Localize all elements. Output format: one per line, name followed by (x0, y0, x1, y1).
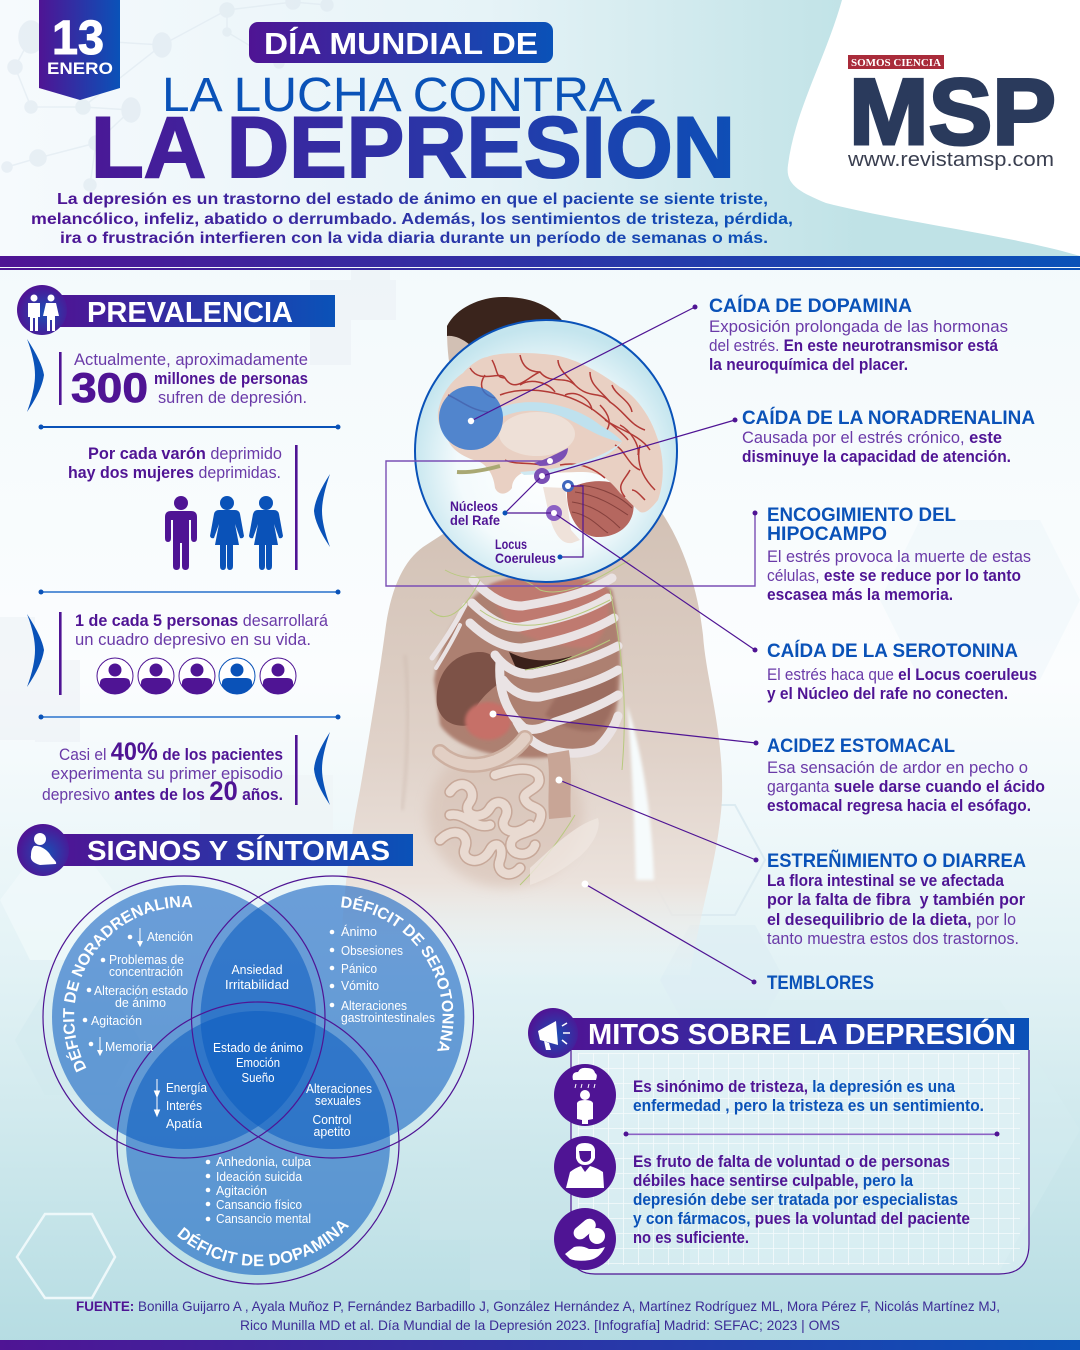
stat: 40%: experimenta su primer episodio (51, 765, 283, 783)
caída de la noradrenalina: disminuye la capacidad de atención. (742, 448, 1011, 466)
serotonina list: Obsesiones (341, 944, 403, 958)
shared: energía: Interés (166, 1099, 202, 1113)
cerebellum (567, 481, 634, 537)
title: LA LUCHA CONTRA (162, 69, 622, 122)
body silhouette (340, 510, 722, 975)
callout nodes (468, 304, 758, 984)
shared: alteraciones (306, 1082, 372, 1139)
shared: energía (154, 1079, 207, 1131)
mitos heading: MITOS SOBRE LA DEPRESIÓN (588, 1017, 1016, 1051)
stat: 40%: Casi el 40% de los pacientes (59, 738, 283, 766)
shared: alteraciones: Control (312, 1113, 352, 1127)
footer sources: FUENTE: Bonilla Guijarro A , Ayala Muñoz P, Fernández Barbadillo J, González Hernández A, Martínez Rodríguez ML, Mora Pérez F, Nicolás Martínez MJ, (76, 1298, 1000, 1314)
mitos heading (528, 1008, 1029, 1058)
panel: mitos (528, 1008, 1029, 1274)
background crosses and hexagons (0, 270, 1080, 1298)
corpus callosum (500, 402, 622, 442)
noradrenalina list (83, 928, 193, 1055)
liver (437, 652, 500, 726)
venn diagram (42, 875, 474, 1285)
encogimiento del hipocampo: ENCOGIMIENTO DEL (767, 504, 956, 526)
estreñimiento o diarrea: La flora intestinal se ve afectada (767, 872, 1005, 890)
callout lines (386, 307, 756, 982)
acidez estomacal: garganta suele darse cuando el ácido (767, 778, 1045, 796)
stat: 300 millones: sufren de depresión. (158, 389, 307, 407)
stat: por cada varón: Por cada varón deprimido (88, 445, 282, 463)
estreñimiento o diarrea: por la falta de fibra y también por (767, 891, 1026, 909)
date ribbon (39, 0, 120, 100)
venn label: noradrenalina: DÉFICIT DE NORADRENALINA (63, 896, 192, 1072)
noradrenalina list: Memoria (105, 1040, 153, 1054)
caída de dopamina: CAÍDA DE DOPAMINA (709, 294, 912, 317)
noradrenalina list: Atención (147, 930, 193, 944)
caída de la serotonina: y el Núcleo del rafe no conecten. (767, 685, 1008, 703)
background molecules (2, 0, 333, 191)
olfactory tract (457, 466, 500, 472)
shared: ansiedad (225, 963, 289, 992)
footer sources: Rico Munilla MD et al. Día Mundial de la Depresión 2023. [Infografía] Madrid: SEFAC; 2023 | OMS (240, 1317, 840, 1333)
dopamina list: Cansancio físico (216, 1198, 302, 1212)
header white curve (788, 0, 1080, 256)
lungs (490, 576, 609, 648)
stat: 300 millones: 300 (71, 364, 148, 411)
locus node (562, 480, 574, 492)
thalamus (499, 412, 575, 456)
acidez estomacal (767, 735, 1045, 815)
shared: energía: Apatía (166, 1117, 202, 1131)
ribs (432, 578, 618, 753)
icon: woman (210, 496, 244, 570)
shared: ansiedad: Ansiedad (232, 963, 283, 977)
sulci (448, 355, 655, 500)
acidez estomacal: Esa sensación de ardor en pecho o (767, 759, 1028, 777)
stat: 300 millones: millones de personas (154, 370, 308, 388)
lower left organs (545, 672, 616, 731)
myth 2 text: y con fármacos, pues la voluntad del paciente (633, 1210, 970, 1228)
node labels: del Rafe (450, 512, 500, 528)
noradrenalina list: Alteración estado (94, 984, 188, 998)
dopamina list: Anhedonia, culpa (216, 1155, 311, 1169)
stat: 300 millones (27, 339, 308, 412)
caída de la serotonina: CAÍDA DE LA SEROTONINA (767, 639, 1018, 662)
brainstem (543, 487, 580, 543)
divider (38, 590, 340, 594)
title pill: DÍA MUNDIAL DE (264, 26, 538, 61)
serotonina list: Ánimo (341, 924, 377, 939)
encogimiento del hipocampo: escasea más la memoria. (767, 586, 953, 604)
stat: 1 de cada 5 (27, 612, 329, 695)
dark cavity (509, 652, 572, 674)
brain lens (415, 320, 677, 582)
dopamina list: Agitación (216, 1184, 267, 1198)
caída de la serotonina: El estrés haca que el Locus coeruleus (767, 666, 1037, 684)
caída de la noradrenalina: Causada por el estrés crónico, este (742, 429, 1002, 447)
serotonina list: Vómito (341, 979, 379, 993)
myth 1 text: Es sinónimo de tristeza, la depresión es una (633, 1078, 956, 1096)
dopamine area (439, 386, 503, 450)
header background (0, 0, 1080, 257)
serotonina list: Alteraciones (341, 999, 407, 1013)
stat: 300 millones: Actualmente, aproximadamente (74, 350, 308, 369)
icon: man (165, 496, 197, 570)
thoracic cavity (434, 576, 620, 758)
caída de dopamina: Exposición prolongada de las hormonas (709, 318, 1008, 336)
myth 2 text (633, 1153, 970, 1247)
shared: ansiedad: Irritabilidad (225, 978, 289, 992)
shared: centre (213, 1041, 303, 1085)
icon: megaphone (538, 1021, 570, 1050)
dopamina list: Cansancio mental (216, 1212, 311, 1226)
shared: centre: Estado de ánimo (213, 1041, 303, 1055)
estreñimiento o diarrea (767, 849, 1026, 948)
dopamina list: Ideación suicida (216, 1170, 302, 1184)
header band (0, 256, 1080, 270)
node labels: Núcleos (450, 498, 498, 514)
panel: prevalencia heading (17, 285, 335, 335)
human body illustration (340, 297, 722, 975)
caída de la noradrenalina: CAÍDA DE LA NORADRENALINA (742, 406, 1035, 429)
footer sources (76, 1298, 1000, 1333)
temblores: TEMBLORES (767, 972, 874, 994)
intro paragraph: ira o frustración interfieren con la vida diaria durante un período de semanas o más. (60, 230, 768, 247)
intestine loops shadow (440, 769, 541, 874)
shared: energía: Energía (166, 1081, 207, 1095)
node labels (450, 498, 556, 566)
estreñimiento o diarrea: el desequilibrio de la dieta, por lo (767, 911, 1016, 929)
encogimiento del hipocampo: HIPOCAMPO (767, 523, 887, 545)
myth 2 text: depresión debe ser tratada por especialistas (633, 1191, 958, 1209)
stat: por cada varón: hay dos mujeres deprimidas. (68, 464, 281, 482)
caída de la noradrenalina (742, 406, 1035, 466)
logo: MSP (849, 59, 1056, 164)
stat: 1 de cada 5: 1 de cada 5 personas desarrollará (75, 612, 329, 630)
myth 2 text: débiles hace sentirse culpable, pero la (633, 1172, 914, 1190)
hip bone (530, 818, 599, 885)
serotonin node (546, 505, 562, 521)
venn label: serotonina: DÉFICIT DE SEROTONINA (341, 896, 454, 1051)
noradrenalina list: concentración (109, 965, 183, 979)
panel: signos y síntomas heading: SIGNOS Y SÍNTOMAS (87, 835, 390, 866)
arm gap (627, 705, 654, 880)
rafe node (534, 468, 550, 484)
divider (38, 424, 340, 430)
bottom band (0, 1340, 1080, 1350)
noradrenalina list: Problemas de (109, 953, 184, 967)
stat: 40% (42, 732, 330, 806)
intestine loops (440, 769, 541, 874)
myth 2 text: Es fruto de falta de voluntad o de personas (633, 1153, 950, 1171)
divider (38, 714, 340, 720)
noradrenalina list: de ánimo (115, 996, 166, 1010)
date ribbon: 13 (52, 12, 104, 65)
estreñimiento o diarrea: tanto muestra estos dos trastornos. (767, 930, 1019, 948)
hair (447, 297, 566, 350)
panel: prevalencia heading: PREVALENCIA (87, 297, 293, 329)
icon: rain person (554, 1064, 616, 1126)
intro paragraph (31, 191, 793, 247)
caída de dopamina (709, 294, 1008, 374)
myth 1 text: enfermedad , pero la tristeza es un sentimiento. (633, 1097, 984, 1115)
date ribbon: ENERO (47, 59, 113, 78)
encogimiento del hipocampo (767, 504, 1031, 604)
left arm crease (402, 655, 408, 810)
venn label: dopamina: DÉFICIT DE DOPAMINA (177, 1220, 350, 1266)
descending colon (558, 752, 560, 818)
logo: www.revistamsp.com (847, 149, 1054, 171)
shared: alteraciones: sexuales (315, 1094, 361, 1108)
caída de dopamina: del estrés. En este neurotransmisor está (709, 337, 999, 355)
serotonina list: gastrointestinales (341, 1011, 435, 1025)
icon: woman (249, 496, 283, 570)
transverse colon (440, 738, 525, 765)
shared: centre: Emoción (236, 1056, 280, 1070)
logo: SOMOS CIENCIA (851, 58, 941, 69)
acidez estomacal: ACIDEZ ESTOMACAL (767, 735, 955, 757)
cerebrum (438, 353, 663, 512)
dopamina list (206, 1155, 311, 1226)
encogimiento del hipocampo: células, este se reduce por lo tanto (767, 567, 1021, 585)
intro paragraph: melancólico, infeliz, abatido o derrumbado. Además, los sentimientos de tristeza, pérdida, (31, 211, 793, 228)
stat: por cada varón (68, 445, 330, 570)
serotonina list: Pánico (341, 962, 377, 976)
encogimiento del hipocampo: El estrés provoca la muerte de estas (767, 548, 1031, 566)
intro paragraph: La depresión es un trastorno del estado de ánimo en que el paciente se siente triste, (57, 191, 768, 208)
caída de dopamina: la neuroquímica del placer. (709, 356, 908, 374)
title: LA DEPRESIÓN (91, 100, 735, 196)
divider (624, 1132, 1000, 1136)
estreñimiento o diarrea: ESTREÑIMIENTO O DIARREA (767, 849, 1026, 872)
stomach (465, 702, 511, 740)
node labels: Coeruleus (495, 550, 556, 566)
icon row: five persons (97, 658, 296, 694)
abdominal shading (427, 743, 583, 887)
head (447, 297, 566, 400)
panel: signos y síntomas heading (17, 824, 413, 876)
icon: pills and hand (554, 1208, 616, 1270)
shared: alteraciones: Alteraciones (306, 1082, 372, 1096)
stat: 1 de cada 5: un cuadro depresivo en su vida. (75, 631, 311, 649)
shared: centre: Sueño (242, 1071, 275, 1085)
acidez estomacal: estomacal regresa hacia el esófago. (767, 797, 1031, 815)
shared: alteraciones: apetito (314, 1125, 351, 1139)
noradrenalina list: Agitación (91, 1014, 142, 1028)
node labels: Locus (495, 536, 527, 552)
myth 2 text: no es suficiente. (633, 1229, 749, 1247)
myth 1 text (633, 1078, 984, 1115)
purple blob (534, 448, 568, 466)
nerves (430, 560, 630, 885)
stat: 40%: depresivo antes de los 20 años. (42, 776, 283, 806)
caída de la serotonina (767, 639, 1037, 703)
icon: doctor (554, 1136, 616, 1198)
serotonina list (330, 924, 435, 1025)
